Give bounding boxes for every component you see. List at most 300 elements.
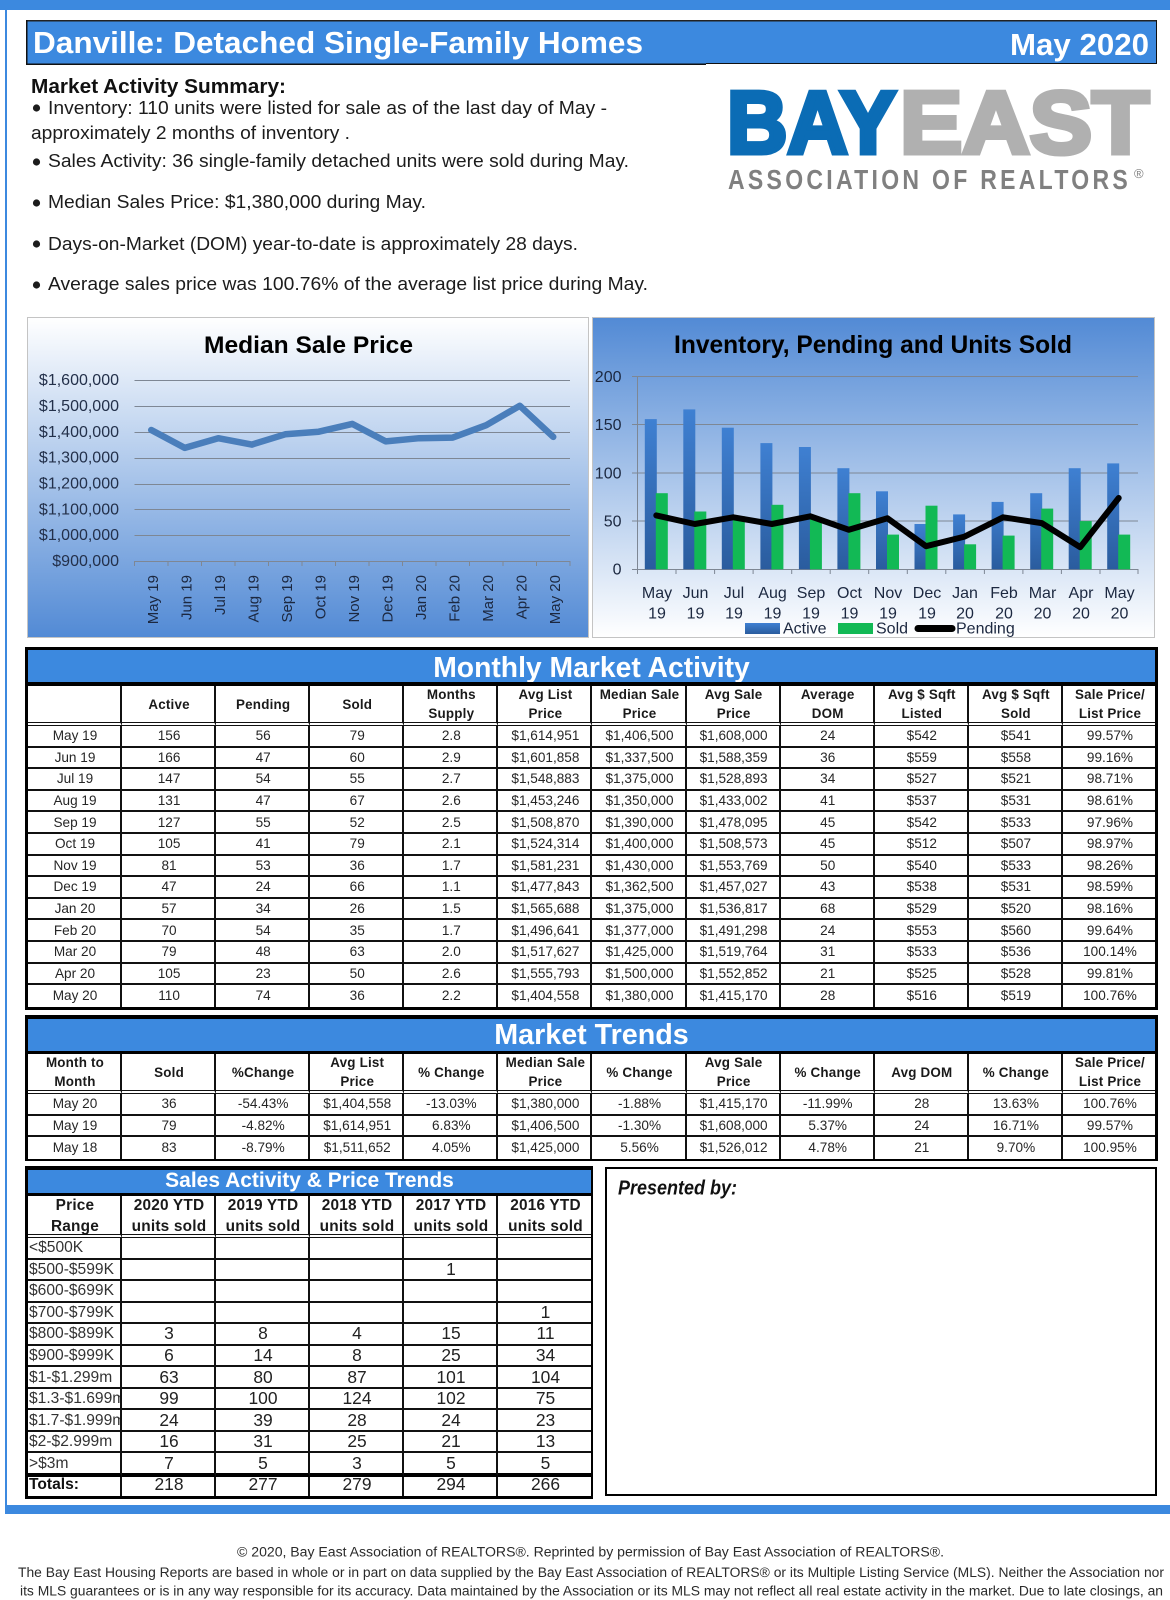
table: monthly market activity: 47 [256,793,271,808]
table: market trends: 5.56% [620,1140,659,1155]
table: market trends: -4.82% [242,1118,285,1133]
table: monthly market activity: 110 [158,988,180,1003]
table: monthly market activity: 67 [350,793,365,808]
table: monthly market activity: Median Sale [600,687,679,702]
table: market trends: 16.71% [993,1118,1039,1133]
table: monthly market activity: Mar 20 [54,944,96,959]
x axis labels: Aug [758,585,787,602]
table: monthly market activity: 2.1 [442,836,461,851]
table: monthly market activity: 105 [158,966,180,981]
table: monthly market activity: 45 [820,815,835,830]
table: monthly market activity: $538 [907,879,937,894]
table: monthly market activity [28,686,1155,1007]
table: monthly market activity: Aug 19 [53,793,97,808]
table: monthly market activity: $1,548,883 [511,771,579,786]
table: monthly market activity: 1.5 [442,901,461,916]
table: monthly market activity: $560 [1001,923,1031,938]
title: Danville: Detached Single-Family Homes [33,25,643,60]
panel: monthly market activity [25,647,1158,1010]
table: monthly market activity: Jun 19 [55,750,95,765]
copyright line: © 2020, Bay East Association of REALTORS®. Reprinted by permission of Bay East Association of REALTORS®. [237,1544,944,1560]
table: monthly market activity: $1,496,641 [511,923,579,938]
table: market trends: $1,415,170 [700,1096,768,1111]
logo: Bay East Association of Realtors [727,80,1151,195]
table: market trends: 4.78% [808,1140,847,1155]
y axis labels: $1,600,000 [39,372,119,389]
bullet: average sales price: Average sales price was 100.76% of the average list price during May. [48,273,648,294]
table: monthly market activity: 70 [161,923,177,938]
table: monthly market activity: 50 [820,858,835,873]
y axis labels: 0 [613,562,622,578]
table: monthly market activity: 28 [820,988,835,1003]
table: monthly market activity: $542 [907,815,937,830]
x axis labels: Feb [990,585,1018,602]
table: monthly market activity: $537 [907,793,937,808]
table: market trends: $1,406,500 [511,1118,579,1133]
table: monthly market activity: $1,430,000 [605,858,674,873]
x axis labels: Jun [683,585,708,602]
table: monthly market activity: $1,588,359 [700,750,768,765]
table: monthly market activity: $1,415,170 [700,988,768,1003]
table: monthly market activity: 68 [820,901,835,916]
table: market trends: 100.76% [1083,1096,1137,1111]
table: monthly market activity: $1,519,764 [700,944,768,959]
median price line [151,406,553,448]
x axis labels: Oct [837,585,862,602]
table: monthly market activity: $1,581,231 [511,858,579,873]
table: monthly market activity: 26 [350,901,365,916]
table: monthly market activity: Apr 20 [55,966,95,981]
table: monthly market activity: 24 [820,923,835,938]
table: monthly market activity: $528 [1001,966,1031,981]
table: monthly market activity: Avg List [518,687,572,702]
table: monthly market activity: 147 [158,771,180,786]
table: units sold by price range: units sold [508,1218,583,1234]
table: monthly market activity: May 20 [53,988,97,1003]
x axis labels: Nov 19 [346,575,363,623]
bullet: inventory [31,97,607,143]
table: monthly market activity: 2.2 [442,988,461,1003]
table: monthly market activity: $558 [1001,750,1031,765]
table: units sold by price range: 2016 YTD [510,1197,581,1214]
table: units sold by price range: $600-$699K [29,1282,114,1299]
y axis labels: $1,400,000 [39,424,119,441]
y axis labels: 150 [595,417,622,434]
panel: sales activity and price trends [25,1166,593,1499]
table: monthly market activity: 98.59% [1087,879,1133,894]
table: monthly market activity: Listed [901,706,942,721]
table: monthly market activity: $1,425,000 [605,944,674,959]
table: monthly market activity: 41 [820,793,835,808]
table: monthly market activity: Supply [428,706,474,721]
table: monthly market activity: 100.14% [1083,944,1137,959]
legend: Pending [956,620,1015,638]
y axis labels: $1,300,000 [39,450,119,466]
table: monthly market activity: $1,555,793 [511,966,579,981]
table: monthly market activity: $519 [1001,988,1031,1003]
table: monthly market activity: 56 [256,728,271,743]
table: monthly market activity: $542 [907,728,937,743]
table: monthly market activity: 35 [350,923,365,938]
footer disclaimer [18,1544,1165,1598]
x axis labels: Sep [797,585,825,602]
table: monthly market activity: 2.9 [442,750,461,765]
x axis labels: 19 [841,606,858,622]
table: monthly market activity: $533 [1001,815,1031,830]
table: market trends: 4.05% [432,1140,471,1155]
x axis labels: 20 [1034,606,1052,622]
table: monthly market activity: $1,478,095 [700,815,768,830]
table: units sold by price range: 2018 YTD [322,1197,392,1214]
table: units sold by price range: units sold [320,1218,394,1234]
panel: median sale price line chart [27,317,589,638]
table: monthly market activity: 36 [350,858,365,873]
x axis labels: Dec 19 [380,575,396,623]
table: market trends: $1,425,000 [511,1140,579,1155]
table: monthly market activity: 54 [256,923,271,938]
y axis labels: 50 [604,514,622,530]
table: units sold by price range: 2020 YTD [134,1197,204,1214]
table: units sold by price range: $2-$2.999m [29,1433,112,1450]
x axis labels: 19 [764,606,782,622]
table: monthly market activity: 98.97% [1087,836,1133,851]
x axis labels: Sep 19 [279,575,296,623]
table: monthly market activity: $516 [907,988,937,1003]
table: monthly market activity: Feb 20 [54,923,96,938]
table: monthly market activity: $553 [907,923,937,938]
table: monthly market activity: $1,553,769 [700,858,768,873]
table: market trends: 21 [914,1140,929,1155]
table: market trends: Avg List [330,1055,384,1070]
page frame: bottom bar [5,1505,1170,1514]
page frame: left rule [5,0,7,1506]
table: monthly market activity: $531 [1001,879,1031,894]
table: monthly market activity: 1.7 [442,923,461,938]
table: monthly market activity: $1,375,000 [605,771,674,786]
x axis labels: 20 [1111,606,1128,622]
table: units sold by price range: Range [51,1218,99,1234]
table: market trends: May 19 [53,1118,97,1133]
table: monthly market activity: Pending [236,697,290,712]
table: market trends: $1,526,012 [700,1140,768,1155]
table: monthly market activity: Dec 19 [53,879,97,894]
x axis labels: Dec [913,585,941,602]
table: monthly market activity: 166 [158,750,180,765]
legend [745,620,1015,638]
table: market trends: 5.37% [808,1118,847,1133]
table: monthly market activity: 43 [820,879,835,894]
table: market trends: % Change [795,1065,861,1080]
table: monthly market activity: $1,524,314 [511,836,579,851]
table: monthly market activity: 98.16% [1087,901,1133,916]
table: monthly market activity: $525 [907,966,937,981]
table: monthly market activity: Avg $ Sqft [982,687,1050,702]
table: market trends: 79 [161,1118,177,1133]
table: monthly market activity: 131 [158,793,180,808]
table: monthly market activity: Nov 19 [53,858,97,873]
table: market trends: -8.79% [242,1140,285,1155]
table: monthly market activity: 105 [158,836,180,851]
table: monthly market activity: DOM [812,706,844,721]
table: monthly market activity: 47 [256,750,271,765]
table: monthly market activity: 31 [820,944,835,959]
table: monthly market activity: Sep 19 [53,815,97,830]
table: market trends: 13.63% [993,1096,1039,1111]
table: monthly market activity: $1,380,000 [605,988,674,1003]
heading: market trends: Market Trends [494,1019,689,1051]
table: monthly market activity: 66 [350,879,365,894]
table: monthly market activity: 24 [256,879,271,894]
table: market trends: $1,608,000 [700,1118,768,1133]
table: market trends: Avg Sale [705,1055,762,1070]
x axis labels: 19 [802,606,820,622]
x axis labels: Mar 20 [480,575,497,622]
table: monthly market activity: $1,552,852 [700,966,768,981]
table: monthly market activity: 24 [820,728,835,743]
table: monthly market activity: $536 [1001,944,1031,959]
table: market trends: 28 [914,1096,929,1111]
table: market trends: Month [54,1074,96,1089]
x axis labels: May [1104,585,1135,602]
table: monthly market activity: 98.61% [1087,793,1133,808]
table: units sold by price range: 2019 YTD [228,1197,298,1214]
table: monthly market activity: 60 [350,750,365,765]
legend: Active [783,620,827,638]
table: monthly market activity: 41 [256,836,271,851]
table: monthly market activity: Price [717,706,750,721]
table: monthly market activity: 127 [158,815,180,830]
disclaimer text: its MLS guarantees or is in any way responsible for its accuracy. Data maintained by the Association or its MLS may not reflect all real estate activity in the market. Due to late closings, an [20,1584,1163,1598]
table: units sold by price range: units sold [226,1218,300,1234]
table: monthly market activity: 34 [256,901,271,916]
presented by label: Presented by: [618,1178,737,1200]
x axis labels: 20 [1072,606,1090,622]
table: monthly market activity: 100.76% [1083,988,1137,1003]
table: monthly market activity: Sale Price/ [1075,687,1145,702]
table: monthly market activity: $541 [1001,728,1031,743]
table: market trends: 100.95% [1083,1140,1137,1155]
table: monthly market activity: 23 [256,966,271,981]
table: monthly market activity: $521 [1001,771,1031,786]
heading: sales activity and price trends [28,1170,591,1193]
table: market trends: $1,614,951 [323,1118,391,1133]
table: market trends: 99.57% [1087,1118,1133,1133]
active bars [645,409,1119,569]
y axis labels: $1,500,000 [39,398,119,415]
x axis labels: 19 [687,606,704,622]
table: units sold by price range: <$500K [29,1239,83,1256]
table: monthly market activity: $507 [1001,836,1031,851]
table: monthly market activity: 54 [256,771,271,786]
table: market trends: -1.88% [618,1096,661,1111]
disclaimer text: The Bay East Housing Reports are based in whole or in part on data supplied by the Bay East Association of REALTORS® or its Multiple Listing Service (MLS). Neither the Association nor [18,1565,1165,1580]
table: market trends: % Change [418,1065,484,1080]
table: units sold by price range: $900-$999K [29,1347,114,1364]
table: monthly market activity: 55 [256,815,271,830]
table: market trends [28,1054,1155,1159]
x axis labels: Nov [874,585,902,602]
y axis labels: 200 [595,369,622,386]
table: monthly market activity: 53 [256,858,271,873]
table: monthly market activity: Price [529,706,562,721]
table: monthly market activity: 21 [820,966,835,981]
summary heading: Market Activity Summary: [31,76,286,98]
table: monthly market activity: $1,406,500 [605,728,674,743]
table: market trends: Sale Price/ [1075,1055,1145,1070]
table: monthly market activity: $1,608,000 [700,728,768,743]
table: monthly market activity: Active [148,697,190,712]
table: market trends: May 20 [53,1096,97,1111]
table: monthly market activity: $1,400,000 [605,836,674,851]
table: monthly market activity: 48 [256,944,271,959]
heading: monthly market activity [28,650,1155,682]
table: monthly market activity: $512 [907,836,937,851]
table: monthly market activity: $527 [907,771,937,786]
x axis labels: Apr 20 [514,575,530,619]
table: monthly market activity: 2.6 [442,966,461,981]
table: monthly market activity: $1,433,002 [700,793,768,808]
table: units sold by price range: $1-$1.299m [29,1369,112,1386]
table: monthly market activity: $1,377,000 [605,923,674,938]
y axis labels: 100 [595,466,622,482]
table: market trends: -13.03% [426,1096,477,1111]
table: market trends: 36 [161,1096,177,1111]
table: monthly market activity: $531 [1001,793,1031,808]
table: monthly market activity: $533 [1001,858,1031,873]
sold bars [656,493,1130,569]
table: monthly market activity: 36 [350,988,365,1003]
y axis labels: $900,000 [52,553,119,570]
x axis labels: 19 [648,606,666,622]
bullet: inventory: approximately 2 months of inventory . [31,122,350,143]
x axis labels: 20 [956,606,974,622]
table: monthly market activity: 2.7 [442,771,461,786]
table: units sold by price range: >$3m [29,1455,68,1472]
table: market trends: May 18 [53,1140,97,1155]
table: monthly market activity: 57 [161,901,177,916]
table: units sold by price range: units sold [132,1218,206,1234]
table: monthly market activity: 55 [350,771,365,786]
table: monthly market activity: 63 [350,944,365,959]
table: market trends: % Change [606,1065,673,1080]
table: market trends: %Change [232,1065,294,1080]
table: units sold by price range: $500-$599K [29,1261,114,1278]
table: monthly market activity: 99.57% [1087,728,1133,743]
table: monthly market activity: 36 [820,750,835,765]
table: monthly market activity: $1,536,817 [700,901,768,916]
table: monthly market activity: 1.7 [442,858,461,873]
table: monthly market activity: 79 [350,728,365,743]
disclaimer text [18,1565,1165,1598]
table: monthly market activity: $1,375,000 [605,901,674,916]
table: monthly market activity: $529 [907,901,937,916]
table: monthly market activity: 98.71% [1087,771,1133,786]
table: monthly market activity: Price [623,706,656,721]
chart title: Inventory, Pending and Units Sold [674,331,1072,359]
table: monthly market activity: $533 [907,944,937,959]
table: monthly market activity: $1,508,573 [700,836,768,851]
table: monthly market activity: Jan 20 [55,901,95,916]
table: market trends: Price [340,1074,374,1089]
table: monthly market activity: Sold [1001,706,1031,721]
panel: market trends [25,1015,1158,1161]
table: market trends: $1,511,652 [324,1140,391,1155]
y axis labels: $1,000,000 [39,527,119,544]
table: market trends: $1,404,558 [323,1096,391,1111]
chart title: Median Sale Price [204,332,413,359]
table: units sold by price range: $700-$799K [29,1304,114,1321]
table: market trends: 9.70% [997,1140,1035,1155]
table: monthly market activity: $1,614,951 [511,728,579,743]
panel: presented by [605,1167,1157,1496]
x axis labels: Mar [1029,585,1057,602]
heading: market trends [28,1019,1155,1051]
table: market trends: List Price [1079,1074,1141,1089]
table: monthly market activity: $1,457,027 [700,879,768,894]
table: market trends: -11.99% [803,1096,853,1111]
table: monthly market activity: $1,404,558 [511,988,579,1003]
x axis labels: Feb 20 [446,575,464,622]
table: monthly market activity: 79 [161,944,177,959]
bullet: inventory: Inventory: 110 units were listed for sale as of the last day of May - [48,97,607,118]
table: monthly market activity: $1,565,688 [511,901,579,916]
x axis labels: Oct 19 [312,575,330,619]
table: monthly market activity: $1,362,500 [605,879,674,894]
table: market trends: Price [717,1074,750,1089]
x axis labels: 19 [918,606,936,622]
table: units sold by price range: 2017 YTD [416,1197,486,1214]
table: monthly market activity: $1,337,500 [605,750,674,765]
table: monthly market activity: 2.5 [442,815,461,830]
table: monthly market activity: $1,508,870 [511,815,579,830]
table: market trends: 24 [914,1118,929,1133]
table: units sold by price range: units sold [414,1218,488,1234]
table: market trends: Median Sale [506,1055,585,1070]
market activity summary text block [31,76,648,294]
table: monthly market activity: Avg $ Sqft [888,687,956,702]
table: monthly market activity: $559 [907,750,937,765]
legend: Sold [876,620,908,638]
logo: Bay East Association of Realtors: ® [1134,166,1144,181]
table: monthly market activity: 74 [256,988,271,1003]
table: monthly market activity: Average [801,687,855,702]
table: monthly market activity: $1,453,246 [511,793,579,808]
table: monthly market activity: 45 [820,836,835,851]
table: units sold by price range [28,1196,591,1496]
pending line [656,498,1119,547]
table: monthly market activity: $520 [1001,901,1031,916]
table: monthly market activity: 156 [158,728,180,743]
table: monthly market activity: Jul 19 [57,771,93,786]
table: monthly market activity: $1,528,893 [700,771,768,786]
table: monthly market activity: $1,500,000 [605,966,674,981]
y axis labels [595,369,622,578]
x axis labels: 20 [995,606,1013,622]
bullet: median sales price: Median Sales Price: $1,380,000 during May. [48,191,426,212]
heading: sales activity and price trends: Sales Activity & Price Trends [165,1169,454,1192]
table: monthly market activity: $1,477,843 [511,879,579,894]
table: monthly market activity: 2.6 [442,793,461,808]
table: monthly market activity: $1,601,858 [511,750,579,765]
x axis labels [642,585,1135,622]
table: market trends: Month to [46,1055,104,1070]
table: monthly market activity: $540 [907,858,937,873]
table: monthly market activity: Sold [342,697,372,712]
table: monthly market activity: 81 [161,858,177,873]
x axis labels: Jan [952,585,978,602]
table: monthly market activity: 1.1 [442,879,461,894]
table: monthly market activity: $1,350,000 [605,793,674,808]
